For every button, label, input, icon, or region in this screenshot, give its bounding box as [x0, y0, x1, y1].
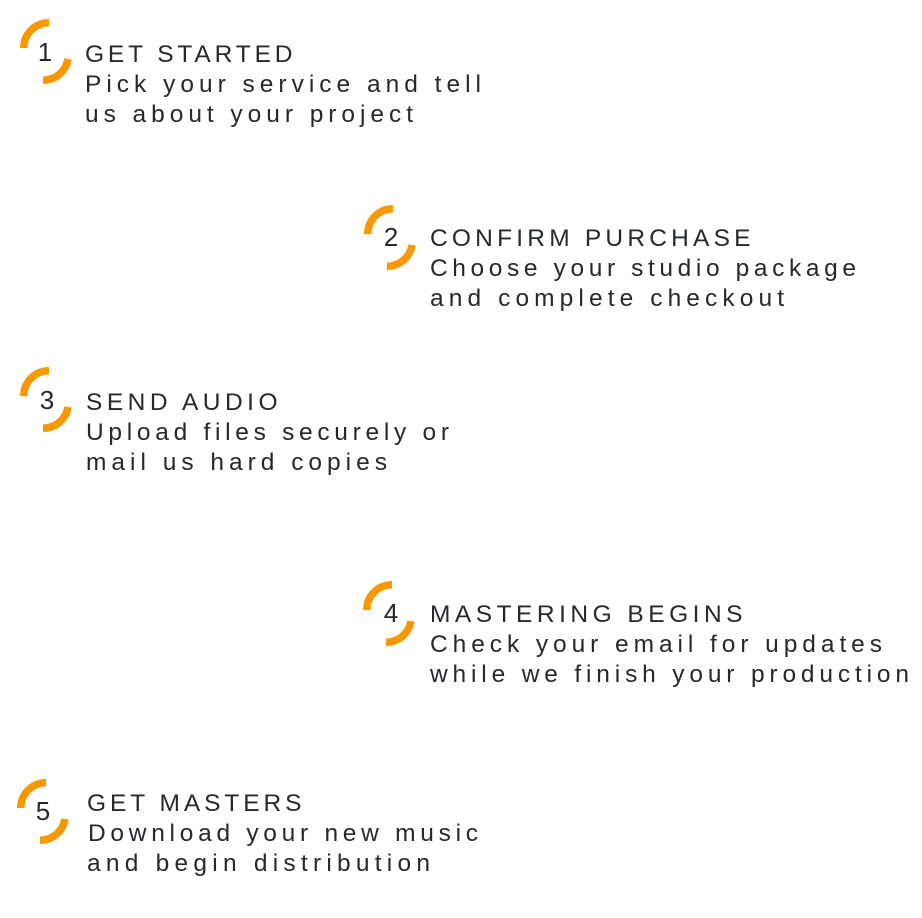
step 4 description	[429, 631, 909, 688]
step 2 description: Choose your studio package	[430, 255, 856, 282]
step 5 description	[87, 820, 478, 877]
icon: step 5 number ring	[21, 783, 65, 840]
step 2 heading: CONFIRM PURCHASE	[430, 225, 750, 252]
step 3 heading: SEND AUDIO	[86, 389, 278, 416]
icon: step 3 number ring	[24, 371, 68, 428]
step 5: get masters	[21, 783, 478, 877]
step 1 description: Pick your service and tell	[85, 71, 481, 98]
step 3 description: Upload files securely or	[86, 419, 449, 446]
icon: step 1 number ring: 1	[38, 37, 52, 67]
step 3 description	[86, 419, 449, 476]
step 4 heading: MASTERING BEGINS	[430, 601, 742, 628]
step 1 heading: GET STARTED	[85, 41, 292, 68]
icon: step 2 number ring: 2	[384, 222, 398, 252]
step 3: send audio	[24, 371, 449, 476]
icon: step 4 number ring	[367, 585, 411, 642]
icon: step 1 number ring	[24, 23, 68, 80]
icon: step 3 number ring: 3	[40, 385, 54, 415]
step 4 description: while we finish your production	[429, 661, 909, 688]
step 5 description: Download your new music	[88, 820, 478, 847]
step 4: mastering begins	[367, 585, 909, 688]
step 3 description: mail us hard copies	[86, 449, 387, 476]
step 2: confirm purchase	[368, 209, 856, 312]
step 5 description: and begin distribution	[87, 850, 430, 877]
step 2 description: and complete checkout	[430, 285, 784, 312]
step 5 heading: GET MASTERS	[87, 790, 302, 817]
step 4 description: Check your email for updates	[430, 631, 882, 658]
step 2 description	[430, 255, 856, 312]
step 1: get started	[24, 23, 481, 128]
icon: step 2 number ring	[368, 209, 412, 266]
icon: step 4 number ring: 4	[384, 598, 398, 628]
step 1 description: us about your project	[85, 101, 413, 128]
icon: step 5 number ring: 5	[36, 796, 50, 826]
step 1 description	[85, 71, 481, 128]
